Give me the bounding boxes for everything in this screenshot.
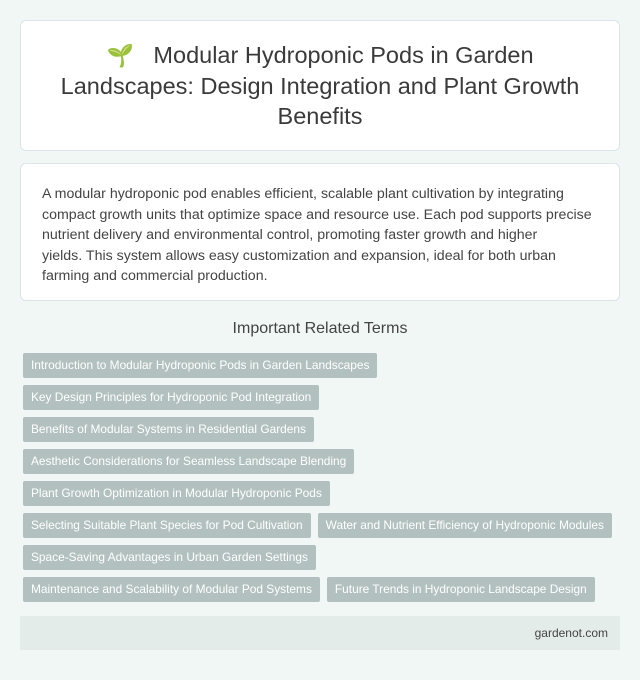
description	[20, 163, 620, 301]
tags: Selecting Suitable Plant Species for Pod Cultivation	[31, 518, 303, 532]
tags	[23, 353, 612, 602]
description: yields. This system allows easy customization and expansion, ideal for both urban farming and commercial production.	[42, 248, 556, 284]
tags: Plant Growth Optimization in Modular Hydroponic Pods	[31, 486, 322, 500]
description: A modular hydroponic pod enables efficient, scalable plant cultivation by integrating compact growth units that optimize space and resource use. Each pod supports precise nutrient delivery and environmental control, promoting faster growth and higher	[42, 186, 592, 243]
tags: Maintenance and Scalability of Modular Pod Systems	[31, 582, 312, 596]
footer	[20, 616, 620, 650]
tags: Key Design Principles for Hydroponic Pod Integration	[31, 390, 311, 404]
heading: related terms: Important Related Terms	[233, 320, 407, 337]
tags: Benefits of Modular Systems in Residential Gardens	[31, 422, 306, 436]
tags: Aesthetic Considerations for Seamless Landscape Blending	[31, 454, 346, 468]
tags: Introduction to Modular Hydroponic Pods in Garden Landscapes	[31, 358, 369, 372]
footer: gardenot.com	[535, 626, 608, 640]
tags: Future Trends in Hydroponic Landscape Design	[335, 582, 587, 596]
tags: Water and Nutrient Efficiency of Hydroponic Modules	[326, 518, 604, 532]
title: 🌱 Modular Hydroponic Pods in Garden Landscapes: Design Integration and Plant Growth Benefits	[61, 42, 579, 129]
tags: Space-Saving Advantages in Urban Garden Settings	[31, 550, 308, 564]
title	[20, 20, 620, 151]
